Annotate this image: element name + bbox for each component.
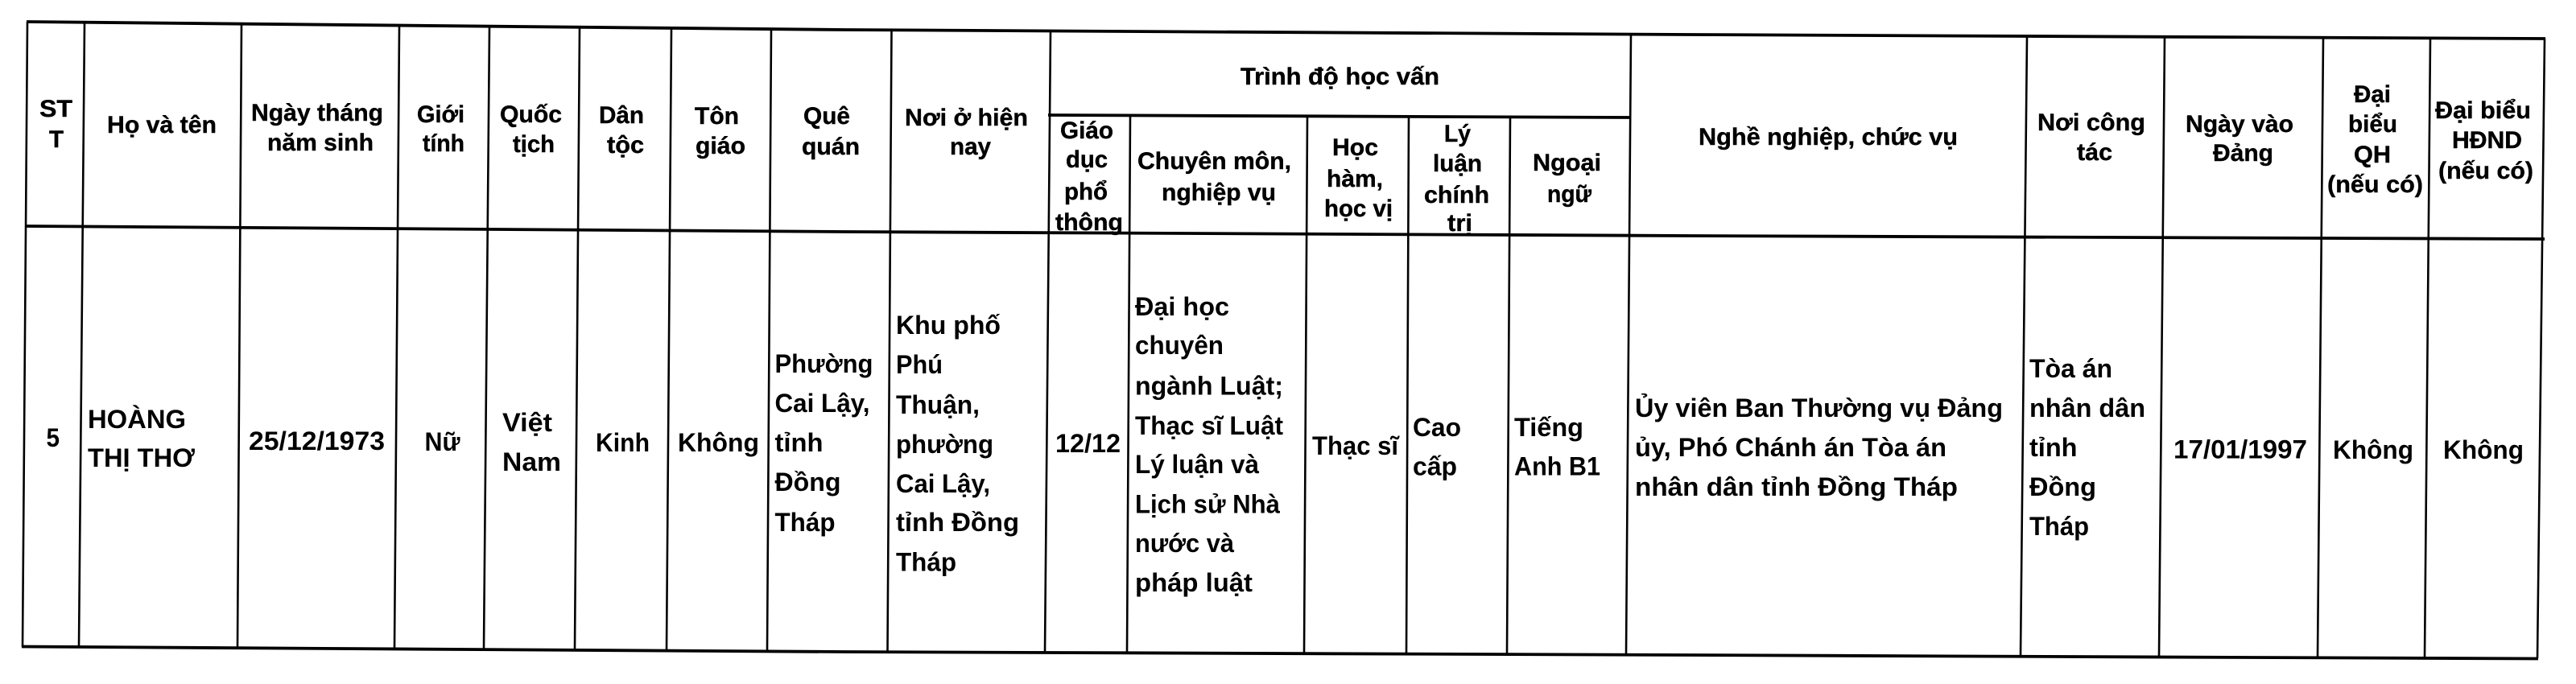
- cell: specialization: ngành Luật;: [1135, 372, 1283, 401]
- heading: current residence: [905, 105, 1028, 160]
- cell: foreign language: Anh B1: [1514, 452, 1600, 481]
- heading: nationality: tịch: [513, 131, 555, 158]
- heading: hometown: Quê: [803, 103, 850, 130]
- heading: national assembly deputy: (nếu có): [2327, 171, 2423, 198]
- heading: national assembly deputy: biểu: [2348, 111, 2397, 138]
- heading: STT: ST: [39, 96, 72, 122]
- heading: party admission date: Đảng: [2213, 140, 2273, 167]
- heading: ethnicity: [599, 102, 644, 159]
- cell: nationality: [502, 408, 561, 476]
- heading: hometown: [802, 103, 860, 160]
- cell: workplace: [2029, 354, 2145, 541]
- cell: specialization: nước và: [1135, 529, 1234, 558]
- heading: foreign language: ngữ: [1547, 181, 1591, 208]
- heading: nationality: [500, 101, 562, 158]
- cell: current residence: tỉnh Đồng: [896, 508, 1019, 537]
- heading: education level: Trình độ học vấn: [1241, 64, 1439, 90]
- heading: workplace: Nơi công: [2037, 109, 2145, 136]
- heading: people's council deputy: [2435, 97, 2533, 184]
- cell: hometown: [774, 349, 873, 537]
- cell: workplace: nhân dân: [2029, 394, 2145, 422]
- heading: political theory: [1424, 121, 1489, 237]
- cell: specialization: [1135, 292, 1283, 597]
- heading: workplace: [2037, 109, 2145, 166]
- heading: academic title and degree: [1324, 134, 1393, 222]
- heading: political theory: chính: [1424, 182, 1489, 208]
- heading: ethnicity: tộc: [607, 132, 644, 159]
- cell: foreign language: [1514, 413, 1600, 481]
- cell: hometown: Đồng: [774, 468, 840, 497]
- heading: gender: [417, 101, 464, 157]
- cell: current residence: Khu phố: [896, 311, 1001, 340]
- data row: [47, 292, 2524, 597]
- cell: hometown: Tháp: [774, 508, 836, 537]
- cell: current residence: Thuận,: [896, 390, 980, 419]
- heading: nationality: Quốc: [500, 101, 562, 128]
- cell: nationality: Nam: [502, 447, 561, 476]
- heading: academic title and degree: Học: [1332, 134, 1378, 161]
- heading: people's council deputy: (nếu có): [2438, 158, 2533, 184]
- cell: people's council deputy: Không: [2443, 435, 2524, 464]
- heading: gender: Giới: [417, 101, 464, 128]
- cell: workplace: Đồng: [2029, 472, 2096, 501]
- cell: hometown: Cai Lậy,: [774, 389, 869, 418]
- header row: [39, 64, 2533, 237]
- cell: foreign language: Tiếng: [1514, 413, 1583, 442]
- cell: date of birth: 25/12/1973: [249, 426, 385, 455]
- cell: political theory: cấp: [1413, 452, 1457, 481]
- cell: general education: 12/12: [1055, 429, 1121, 458]
- heading: political theory: trị: [1447, 210, 1472, 237]
- heading: academic title and degree: hàm,: [1327, 166, 1383, 192]
- heading: specialization: Chuyên môn,: [1137, 148, 1291, 175]
- cell: number: 5: [47, 423, 60, 452]
- heading: date of birth: Ngày tháng: [251, 100, 383, 126]
- cell: national assembly deputy: Không: [2333, 435, 2413, 464]
- cell: current residence: Phú: [896, 350, 943, 379]
- cell: full name: HOÀNG: [88, 405, 186, 434]
- heading: political theory: luận: [1433, 150, 1482, 177]
- heading: full name: Họ và tên: [107, 112, 217, 138]
- cell: political theory: Cao: [1413, 413, 1461, 442]
- heading: national assembly deputy: [2327, 81, 2423, 198]
- heading: current residence: Nơi ở hiện: [905, 105, 1028, 131]
- heading: general education: [1055, 117, 1123, 236]
- heading: ethnicity: Dân: [599, 102, 644, 129]
- heading: occupation and position: Nghề nghiệp, chức vụ: [1699, 124, 1958, 150]
- heading: religion: Tôn: [695, 103, 739, 130]
- heading: party admission date: Ngày vào: [2186, 111, 2293, 138]
- cell: workplace: tỉnh: [2029, 433, 2077, 462]
- heading: current residence: nay: [950, 134, 991, 160]
- heading: general education: thông: [1055, 209, 1123, 236]
- cell: gender: Nữ: [425, 427, 460, 456]
- cell: full name: [88, 405, 196, 472]
- heading: national assembly deputy: QH: [2354, 142, 2391, 168]
- heading: specialization: nghiệp vụ: [1162, 179, 1276, 206]
- heading: gender: tính: [423, 130, 464, 157]
- cell: party admission date: 17/01/1997: [2174, 435, 2307, 464]
- cell: political theory: [1413, 413, 1461, 481]
- heading: workplace: tác: [2077, 139, 2112, 166]
- cell: hometown: tỉnh: [774, 428, 823, 457]
- cell: workplace: Tháp: [2029, 512, 2089, 541]
- heading: religion: [695, 103, 745, 159]
- heading: people's council deputy: Đại biểu: [2435, 97, 2531, 124]
- heading: foreign language: Ngoại: [1533, 150, 1601, 176]
- heading: date of birth: năm sinh: [267, 130, 374, 156]
- heading: date of birth: [251, 100, 383, 156]
- heading: religion: giáo: [696, 133, 745, 159]
- heading: hometown: quán: [802, 134, 860, 160]
- cell: specialization: pháp luật: [1135, 568, 1253, 597]
- heading: academic title and degree: học vị: [1324, 196, 1393, 222]
- heading: general education: phổ: [1064, 179, 1108, 205]
- cell: nationality: Việt: [502, 408, 552, 437]
- heading: STT: [39, 96, 72, 153]
- cell: ethnicity: Kinh: [596, 428, 650, 457]
- heading: general education: dục: [1066, 146, 1108, 173]
- heading: specialization: [1137, 148, 1291, 206]
- cell: religion: Không: [678, 428, 759, 457]
- heading: general education: Giáo: [1060, 117, 1113, 144]
- cell: specialization: Đại học: [1135, 292, 1229, 321]
- heading: foreign language: [1533, 150, 1601, 208]
- heading: party admission date: [2186, 111, 2293, 167]
- heading: national assembly deputy: Đại: [2354, 81, 2391, 108]
- cell: specialization: Lịch sử Nhà: [1135, 489, 1280, 518]
- cell: current residence: phường: [896, 430, 993, 459]
- cell: full name: THỊ THƠ: [88, 443, 196, 472]
- heading: people's council deputy: HĐND: [2452, 127, 2522, 154]
- heading: STT: T: [49, 126, 64, 153]
- cell: current residence: Cai Lậy,: [896, 469, 990, 498]
- cell: current residence: Tháp: [896, 547, 956, 576]
- cell: specialization: chuyên: [1135, 331, 1224, 360]
- cell: degree: Thạc sĩ: [1312, 431, 1400, 460]
- cell: current residence: [896, 311, 1019, 576]
- cell: occupation and position: [1635, 394, 2003, 501]
- cell: occupation and position: ủy, Phó Chánh án Tòa án: [1635, 433, 1946, 462]
- cell: occupation and position: nhân dân tỉnh Đồng Tháp: [1635, 472, 1958, 501]
- cell: occupation and position: Ủy viên Ban Thường vụ Đảng: [1635, 394, 2003, 422]
- cell: specialization: Thạc sĩ Luật: [1135, 411, 1283, 440]
- cell: specialization: Lý luận và: [1135, 450, 1259, 479]
- cell: workplace: Tòa án: [2029, 354, 2112, 383]
- heading: political theory: Lý: [1444, 121, 1471, 147]
- cell: hometown: Phường: [774, 349, 873, 378]
